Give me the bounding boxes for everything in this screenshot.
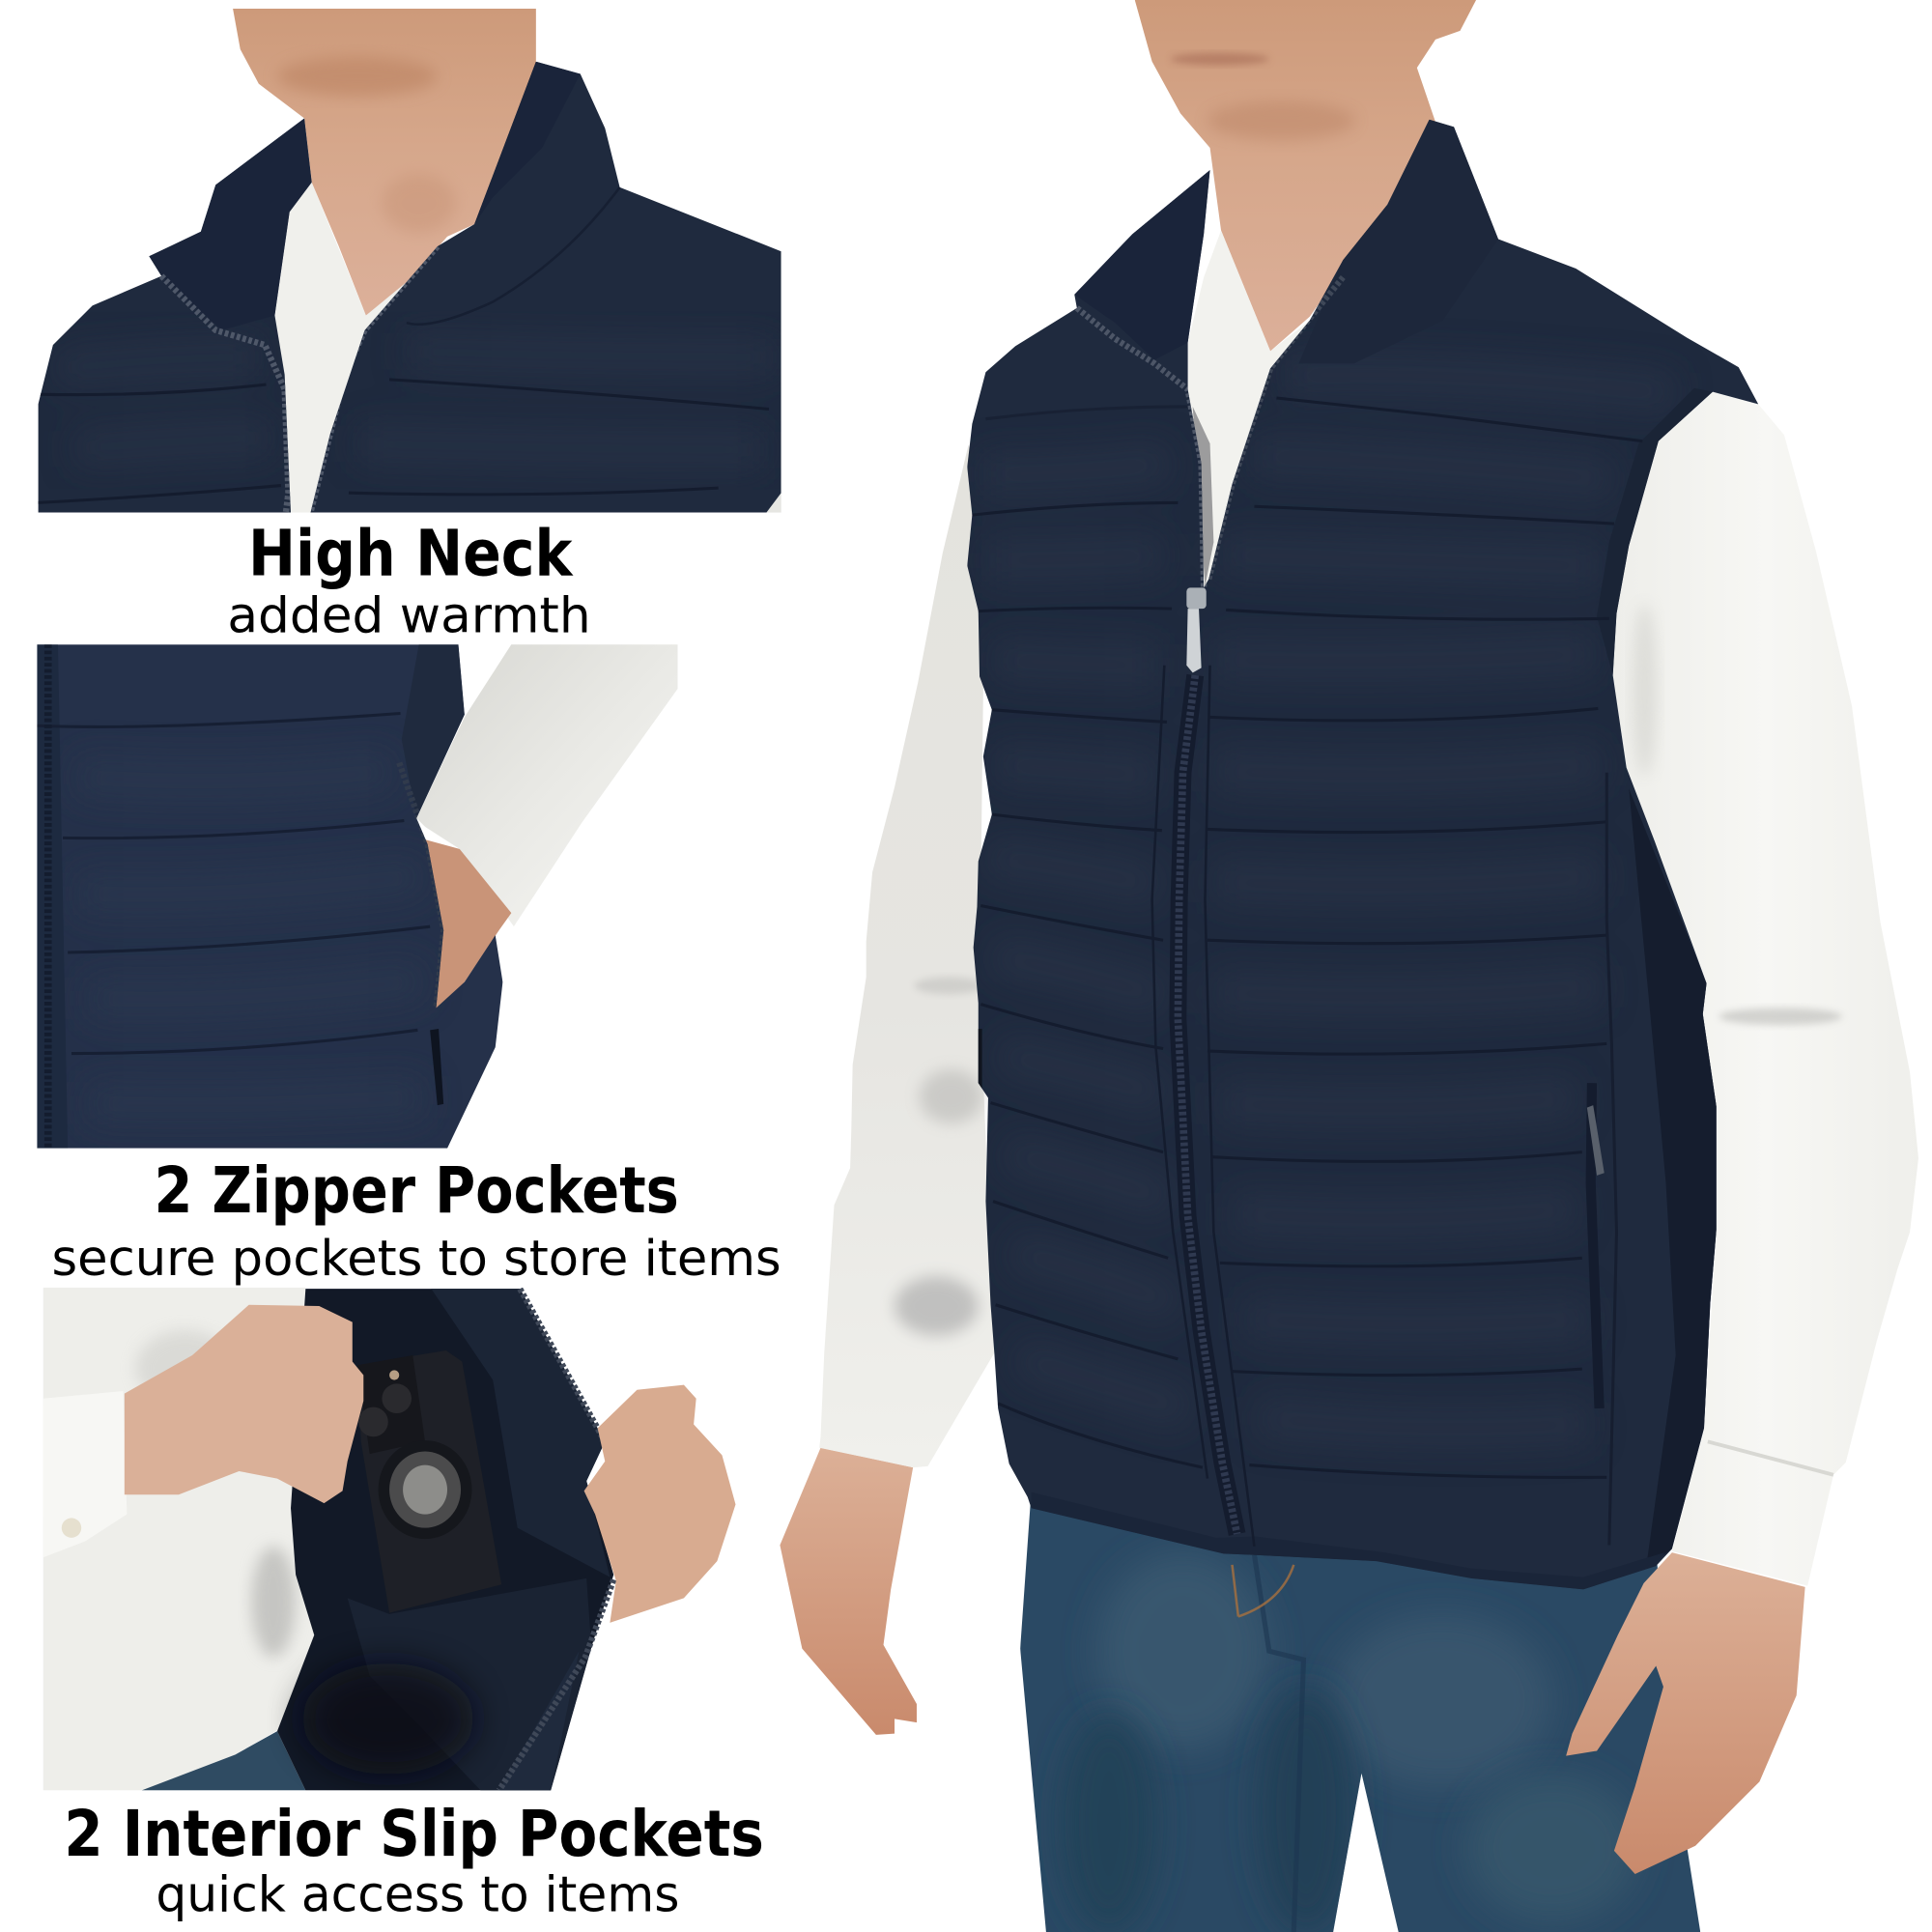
right pocket zipper pull xyxy=(1587,1105,1605,1176)
upper right zipper teeth xyxy=(1208,277,1343,579)
quilting seams xyxy=(37,714,430,1054)
left collar interior xyxy=(1074,170,1210,359)
side seam xyxy=(1606,773,1616,1545)
main photo: man wearing navy vest xyxy=(780,0,1918,1932)
panel: high neck photo xyxy=(31,9,795,518)
caption: added warmth: added warmth xyxy=(227,587,591,644)
left zipper teeth xyxy=(161,276,288,513)
side panel xyxy=(402,644,465,818)
right hand xyxy=(1566,1552,1805,1874)
pocket zipper xyxy=(399,763,443,1008)
corner of sleeve xyxy=(766,493,781,513)
caption: secure pockets: secure pockets to store items xyxy=(52,1231,781,1288)
vest quilting seams xyxy=(972,398,1642,1477)
vest xyxy=(949,111,1775,1602)
right collar xyxy=(1343,120,1498,261)
placket stitching xyxy=(1152,666,1254,1547)
right zipper teeth xyxy=(310,246,438,513)
hand in pocket xyxy=(425,839,512,1009)
left pocket pull xyxy=(978,1029,982,1090)
heading: high neck: High Neck xyxy=(248,516,574,591)
armhole band xyxy=(1597,388,1713,675)
collar seam xyxy=(407,187,620,325)
vest interior xyxy=(277,1289,613,1790)
sleeve xyxy=(416,644,678,926)
puffy highlights xyxy=(55,352,777,450)
shirt cuff xyxy=(43,1391,127,1557)
right hand xyxy=(584,1385,735,1623)
dark side panel xyxy=(1629,788,1717,1567)
collar right interior xyxy=(438,62,581,246)
centre zipper pull xyxy=(1186,587,1207,672)
left hand xyxy=(780,1448,917,1735)
caption: quick access: quick access to items xyxy=(156,1866,679,1923)
left shirt sleeve xyxy=(819,444,994,1467)
vest shading: puffy highlights xyxy=(981,538,1219,852)
jeans xyxy=(1010,1479,1713,1932)
zipper teeth xyxy=(1178,675,1237,1534)
heading: 2 zipper pockets: 2 Zipper Pockets xyxy=(154,1152,679,1228)
jeans xyxy=(142,1731,305,1790)
collar interior xyxy=(149,118,312,330)
phone xyxy=(357,1350,501,1613)
centre placket xyxy=(37,644,68,1149)
shirt collar and placket xyxy=(1188,231,1310,587)
centre zipper teeth xyxy=(45,644,51,1149)
shirt xyxy=(274,183,405,512)
left hand holding phone xyxy=(125,1305,363,1503)
upper left zipper teeth xyxy=(1077,308,1204,587)
vest xyxy=(31,49,795,518)
right pocket zipper xyxy=(1591,1083,1600,1408)
vest xyxy=(31,640,511,1152)
hem band xyxy=(1032,1508,1663,1590)
right shirt sleeve xyxy=(1613,392,1918,1586)
panel: interior pockets photo xyxy=(43,1288,735,1790)
face and neck xyxy=(233,9,536,316)
centre zipper xyxy=(1178,675,1237,1534)
phone magnet ring xyxy=(379,1440,472,1539)
heading: 2 interior slip pockets: 2 Interior Slip Pockets xyxy=(64,1796,764,1871)
pocket zipper pull xyxy=(430,1029,443,1105)
face and neck xyxy=(1127,0,1485,357)
panel: zipper pockets photo xyxy=(31,640,678,1152)
quilting seams xyxy=(39,380,769,502)
shirt xyxy=(43,1288,314,1790)
puffy highlights xyxy=(74,770,425,1105)
